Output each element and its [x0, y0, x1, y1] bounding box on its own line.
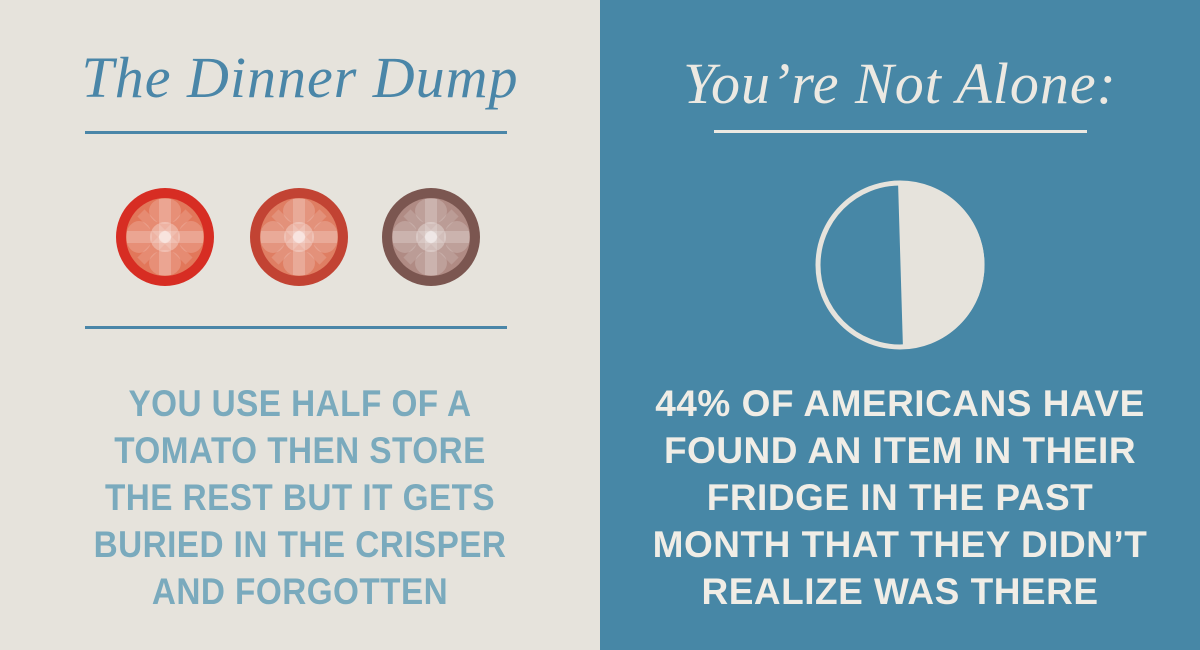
- title: The Dinner Dump: The Dinner Dump: [81, 45, 519, 110]
- icon: fresh tomato: [116, 188, 214, 286]
- text: statistic: MONTH THAT THEY DIDN’T: [653, 524, 1147, 565]
- tomatoes row: [116, 188, 480, 286]
- icon: older tomato: [250, 188, 348, 286]
- text: statistic: REALIZE WAS THERE: [701, 571, 1099, 612]
- text: tomato description: YOU USE HALF OF A: [128, 383, 472, 424]
- icon: rotten tomato: [382, 188, 480, 286]
- panel: you're not alone: [600, 0, 1200, 650]
- text: statistic: [653, 383, 1147, 612]
- text: statistic: 44% OF AMERICANS HAVE: [655, 383, 1145, 424]
- text: statistic: FOUND AN ITEM IN THEIR: [664, 430, 1136, 471]
- title: You're Not Alone: You’re Not Alone:: [683, 51, 1117, 116]
- text: tomato description: TOMATO THEN STORE: [114, 430, 486, 471]
- pie chart: 44%: [816, 180, 985, 350]
- panel: dinner dump: [0, 0, 600, 650]
- text: tomato description: THE REST BUT IT GETS: [105, 477, 495, 518]
- text: tomato description: AND FORGOTTEN: [152, 571, 448, 612]
- text: tomato description: BURIED IN THE CRISPER: [94, 524, 506, 565]
- text: tomato description: [94, 383, 506, 612]
- text: statistic: FRIDGE IN THE PAST: [707, 477, 1093, 518]
